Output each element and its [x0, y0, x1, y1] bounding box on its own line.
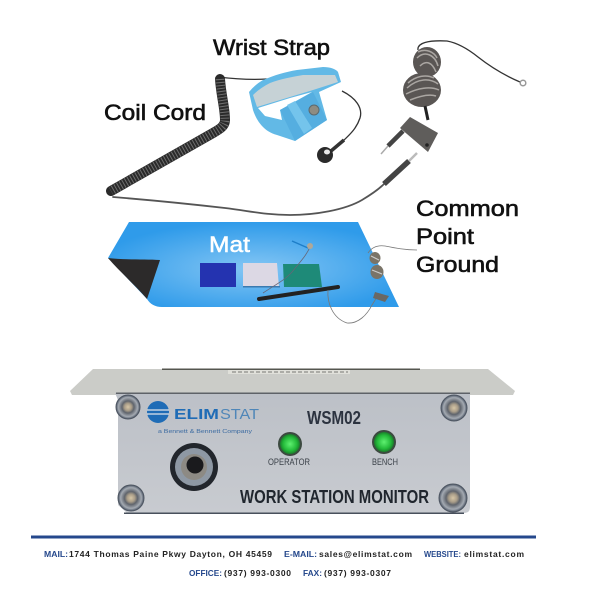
sample squares	[200, 263, 322, 288]
footer rule	[31, 536, 536, 538]
top plate	[70, 369, 515, 395]
footer line: phone and fax: OFFICE:	[189, 568, 222, 578]
label: Common Point Ground: Common	[416, 196, 519, 221]
device: work station monitor	[70, 368, 515, 514]
label: Common Point Ground: Point	[416, 224, 474, 249]
footer line: address, email, website: MAIL:	[44, 549, 68, 559]
coil cord	[111, 77, 384, 215]
jack	[170, 443, 218, 491]
footer line: phone and fax: (937) 993-0307	[324, 568, 391, 578]
footer line: address, email, website: sales@elimstat.com	[319, 549, 412, 559]
footer line: phone and fax	[189, 568, 391, 578]
label: Common Point Ground	[416, 196, 519, 277]
icon: wrist strap	[249, 67, 361, 163]
logo: a Bennett & Bennett Company	[158, 429, 252, 435]
logo: STAT	[220, 406, 259, 423]
label: Common Point Ground: Ground	[416, 252, 499, 277]
logo	[147, 401, 259, 435]
mat	[108, 222, 417, 323]
front panel	[115, 393, 470, 513]
bench LED: BENCH	[372, 457, 398, 467]
mat corner	[108, 258, 160, 299]
footer line: address, email, website: 1744 Thomas Paine Pkwy Dayton, OH 45459	[69, 549, 272, 559]
label: Coil Cord: Coil Cord	[104, 100, 206, 125]
logo: ELIM	[174, 406, 219, 423]
operator LED: OPERATOR	[268, 457, 310, 467]
operator LED	[268, 432, 310, 467]
label: Work Station Monitor: WORK STATION MONITOR	[240, 487, 429, 507]
label: WSM02: WSM02	[307, 408, 361, 428]
screws	[116, 395, 467, 512]
label: Wrist Strap: Wrist Strap	[213, 35, 330, 60]
footer line: address, email, website: E-MAIL:	[284, 549, 317, 559]
icon: common point ground cord and plugs	[381, 41, 526, 184]
label: Mat: Mat	[209, 232, 250, 257]
footer line: phone and fax: FAX:	[303, 568, 322, 578]
footer line: phone and fax: (937) 993-0300	[224, 568, 291, 578]
bench LED	[372, 430, 398, 467]
mat wrist strap	[259, 241, 338, 299]
footer line: address, email, website: WEBSITE:	[424, 549, 461, 559]
footer line: address, email, website: elimstat.com	[464, 549, 524, 559]
footer line: address, email, website	[44, 549, 524, 559]
mat ground cord	[328, 246, 417, 323]
